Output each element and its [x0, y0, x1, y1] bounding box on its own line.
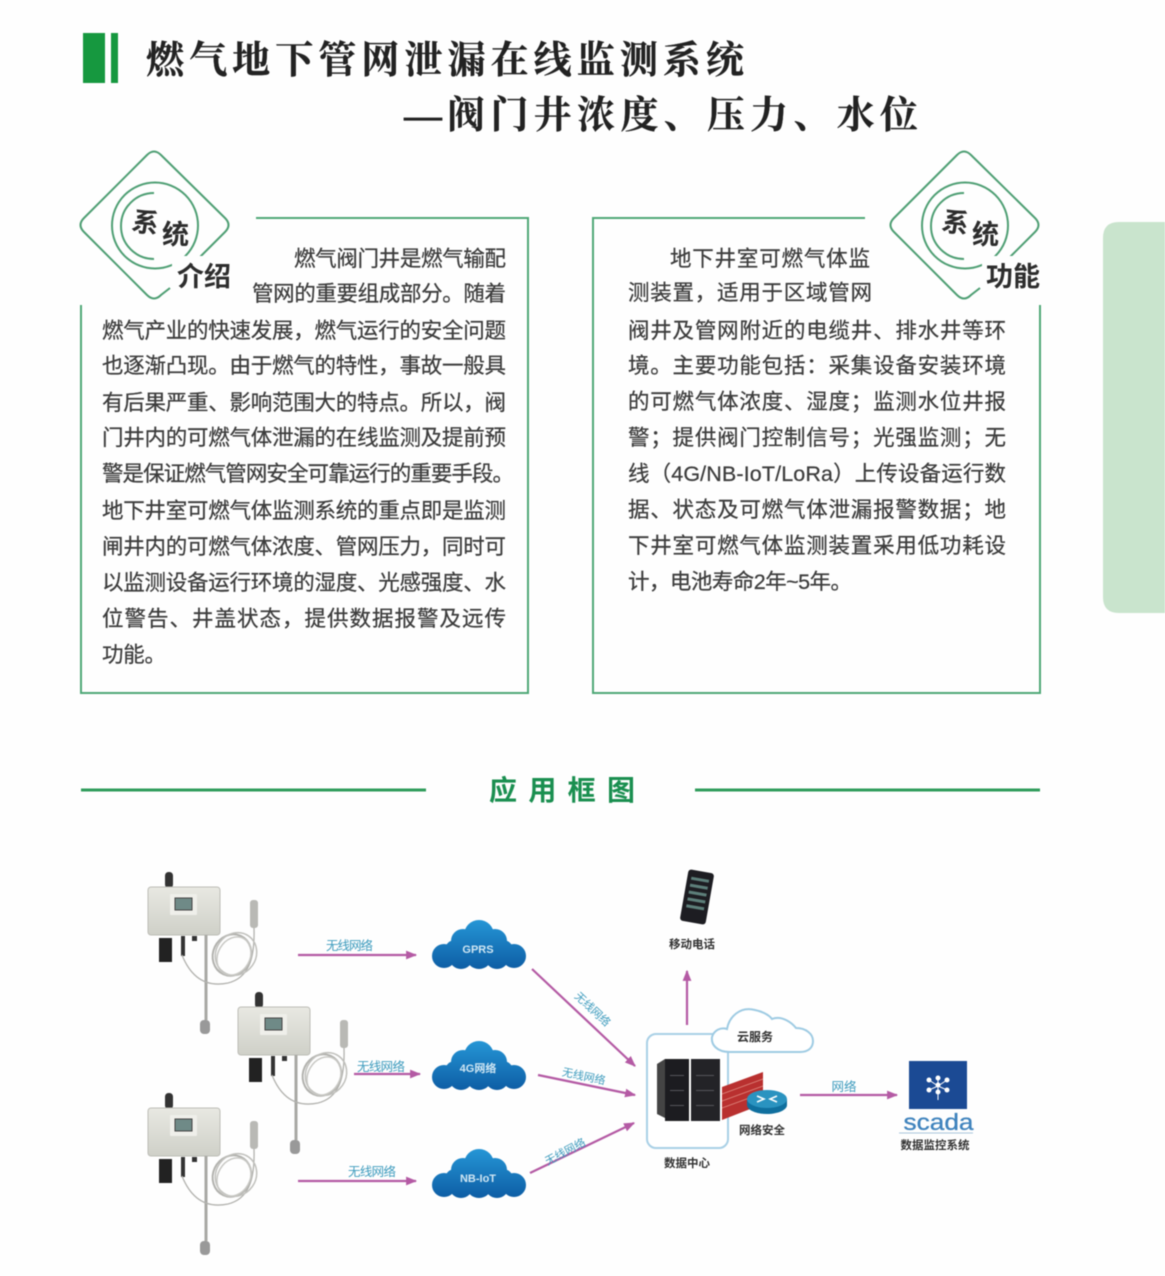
cloud: NB-IoT — [432, 1149, 526, 1198]
cloud: GPRS: GPRS — [462, 944, 494, 956]
icon: firewall — [722, 1072, 763, 1120]
arrow: 4G to data centre — [538, 1065, 635, 1095]
arrow: to SCADA: 网络 — [831, 1079, 857, 1094]
text block: introduction — [102, 247, 514, 667]
logo: SCADA: 数据监控系统 — [900, 1138, 970, 1152]
panel: data centre frame — [647, 1034, 728, 1148]
device: sensor unit 3 — [148, 1093, 265, 1255]
text block: functions: 警；提供阀门控制信号；光强监测；无 — [628, 426, 1006, 450]
text block: introduction: 警是保证燃气管网安全可靠运行的重要手段。 — [102, 462, 514, 486]
panel: system functions — [593, 152, 1044, 693]
arrow: to SCADA — [800, 1079, 897, 1095]
text block: introduction: 有后果严重、影响范围大的特点。所以，阀 — [102, 391, 506, 415]
cloud: 4G — [432, 1041, 526, 1090]
text block: introduction: 功能。 — [102, 643, 166, 667]
badge: system introduction — [80, 152, 234, 298]
text block: introduction: 管网的重要组成部分。随着 — [252, 282, 506, 306]
text block: functions: 下井室可燃气体监测装置采用低功耗设 — [628, 534, 1006, 558]
logo: SCADA — [899, 1061, 974, 1152]
text block: introduction: 门井内的可燃气体泄漏的在线监测及提前预 — [102, 426, 506, 450]
cloud: 4G: 4G网络 — [460, 1061, 496, 1075]
text block: functions — [628, 247, 1006, 594]
text block: functions: 据、状态及可燃气体泄漏报警数据；地 — [628, 498, 1006, 522]
text block: introduction: 燃气阀门井是燃气输配 — [294, 247, 506, 271]
title marker — [83, 33, 118, 83]
text block: functions: 计，电池寿命2年~5年。 — [628, 570, 852, 594]
text block: introduction: 以监测设备运行环境的湿度、光感强度、水 — [102, 571, 506, 595]
text block: functions: 线（4G/NB-IoT/LoRa）上传设备运行数 — [628, 462, 1006, 486]
logo: SCADA: scada — [904, 1109, 974, 1135]
badge: system introduction: 介绍 — [177, 262, 231, 292]
badge: system functions — [890, 152, 1044, 298]
text block: introduction: 燃气产业的快速发展，燃气运行的安全问题 — [102, 319, 506, 343]
text block: introduction: 闸井内的可燃气体浓度、管网压力，同时可 — [102, 535, 506, 559]
cloud: cloud service — [712, 1009, 813, 1052]
arrow: NB-IoT to data centre — [530, 1123, 634, 1173]
label: mobile phone: 移动电话 — [669, 937, 715, 951]
text block: introduction: 也逐渐凸现。由于燃气的特性，事故一般具 — [102, 354, 506, 378]
panel frame left — [81, 218, 528, 693]
label: data centre: 数据中心 — [664, 1156, 710, 1170]
device: sensor unit 1 — [148, 872, 265, 1034]
panel frame right — [593, 218, 1040, 693]
title: 燃气地下管网泄漏在线监测系统 — [145, 40, 746, 82]
text block: functions: 测装置，适用于区域管网 — [628, 281, 872, 305]
arrow: 4G to data centre: 无线网络 — [561, 1065, 607, 1088]
label: network security: 网络安全 — [739, 1123, 785, 1137]
arrow: GPRS to data centre — [532, 969, 635, 1066]
arrow: to mobile phone — [686, 971, 688, 1025]
icon: server racks — [657, 1059, 720, 1121]
title: —阀门井浓度、压力、水位 — [403, 95, 918, 137]
section heading: application diagram: 应用框图 — [489, 775, 635, 806]
arrow: wireless 2 — [354, 1059, 420, 1074]
arrow: wireless 2: 无线网络 — [357, 1059, 405, 1074]
badge: system functions: 统 — [972, 220, 999, 250]
arrow: NB-IoT to data centre: 无线网络 — [542, 1135, 588, 1168]
cloud: cloud service: 云服务 — [737, 1029, 773, 1044]
title — [145, 40, 918, 137]
badge: system introduction: 统 — [162, 220, 189, 250]
text block: functions: 境。主要功能包括：采集设备安装环境 — [628, 354, 1006, 378]
text block: functions: 地下井室可燃气体监 — [670, 247, 870, 271]
icon: router — [747, 1090, 787, 1114]
panel: system introduction — [80, 152, 528, 693]
badge: system functions: 系 — [939, 206, 971, 240]
badge: system introduction: 系 — [129, 206, 161, 240]
cloud: GPRS — [432, 920, 526, 969]
device: sensor unit 2 — [238, 992, 355, 1154]
cloud: NB-IoT: NB-IoT — [460, 1173, 496, 1185]
icon: mobile phone — [680, 869, 714, 925]
arrow: wireless 1 — [298, 938, 416, 955]
badge: system functions: 功能 — [986, 262, 1040, 292]
right side tab — [1103, 222, 1165, 613]
arrow: wireless 1: 无线网络 — [326, 938, 373, 953]
diagram: application architecture — [148, 869, 974, 1255]
text block: functions: 阀井及管网附近的电缆井、排水井等环 — [628, 319, 1006, 343]
arrow: GPRS to data centre: 无线网络 — [572, 989, 614, 1029]
text block: introduction: 位警告、井盖状态，提供数据报警及远传 — [102, 607, 506, 631]
text block: functions: 的可燃气体浓度、湿度；监测水位井报 — [628, 390, 1006, 414]
arrow: wireless 3: 无线网络 — [348, 1164, 396, 1179]
text block: introduction: 地下井室可燃气体监测系统的重点即是监测 — [102, 499, 506, 523]
arrow: wireless 3 — [298, 1164, 416, 1181]
